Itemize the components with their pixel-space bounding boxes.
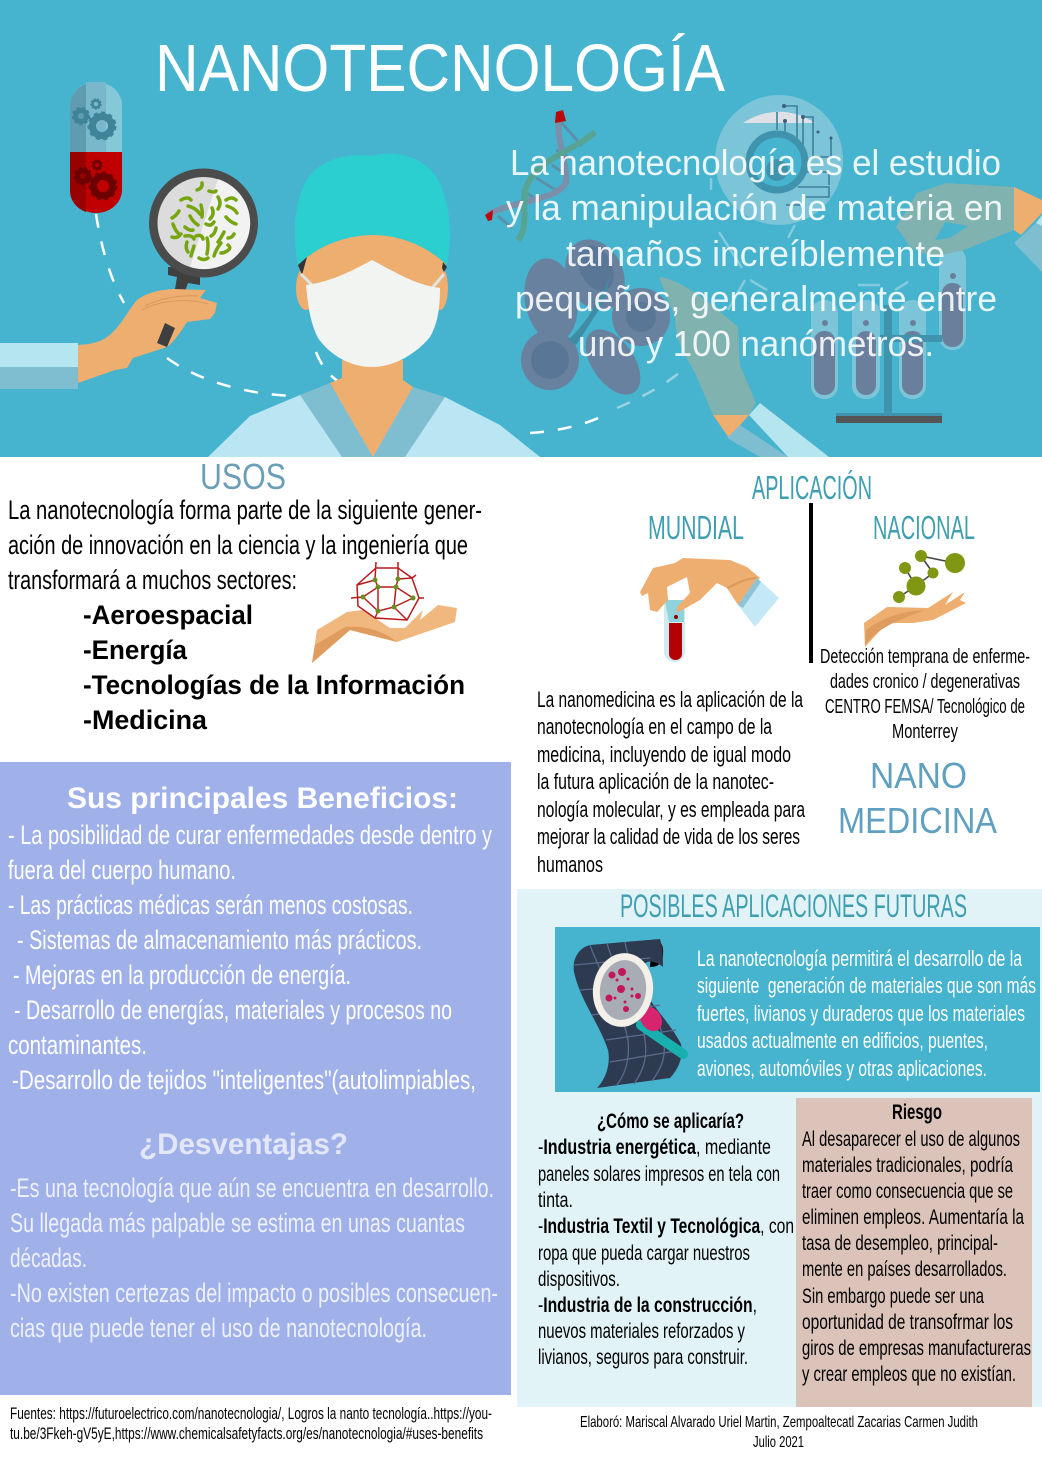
title: NANOTECNOLOGÍA [155, 31, 725, 106]
credits [580, 1414, 978, 1451]
intro text: pequeños, generalmente entre [515, 278, 997, 319]
riesgo text [802, 1128, 1031, 1386]
usos paragraph: transformará a muchos sectores: [8, 565, 297, 595]
intro text: tamaños increíblemente [566, 233, 945, 274]
dashed path [96, 214, 679, 433]
heading: aplicacion: APLICACIÓN [752, 469, 872, 506]
icon: gloved hand [659, 277, 829, 457]
panel: beneficios [0, 762, 511, 1395]
text: mundial: mejorar la calidad de vida de los seres [537, 824, 800, 849]
benefits list: contaminantes. [8, 1030, 147, 1060]
disadvantages text: -No existen certezas del impacto o posibles consecuen- [10, 1278, 498, 1308]
disadvantages text: décadas. [10, 1243, 87, 1273]
intro text: uno y 100 nanómetros. [578, 323, 934, 364]
section: aplicacion [537, 469, 1030, 877]
callout: materiales [555, 927, 1040, 1092]
usos paragraph [8, 495, 482, 595]
section: usos [8, 456, 482, 735]
intro text [506, 142, 1003, 364]
text: como se aplicaria: ¿Cómo se aplicaría? [597, 1110, 744, 1133]
disadvantages text: -Es una tecnología que aún se encuentra en desarrollo. [10, 1173, 494, 1203]
sources [10, 1405, 492, 1443]
text: mundial: nanotecnología en el campo de la [537, 714, 773, 739]
text: como se aplicaria [538, 1110, 794, 1369]
benefits list: - Desarrollo de energías, materiales y procesos no [14, 995, 452, 1025]
heading: nacional: NACIONAL [873, 509, 975, 546]
benefits list: - Mejoras en la producción de energía. [13, 960, 351, 990]
panel: riesgo [796, 1098, 1032, 1407]
benefits list [8, 820, 492, 1095]
heading: nano medicina: NANO [870, 755, 967, 796]
icon: upper right gloved hand [896, 183, 1042, 272]
icon: hand with molecule [864, 550, 966, 647]
text: como se aplicaria: tinta. [538, 1189, 573, 1212]
heading: nano medicina [838, 755, 997, 841]
benefits list: - La posibilidad de curar enfermedades desde dentro y [8, 820, 492, 850]
text: como se aplicaria: livianos, seguros para construir. [538, 1346, 748, 1369]
panel: futuras [517, 888, 1042, 1407]
text: como se aplicaria: -Industria Textil y Tecnológica, con [538, 1215, 794, 1238]
heading: riesgo: Riesgo [892, 1101, 942, 1124]
heading: nano medicina: MEDICINA [838, 800, 997, 841]
usos list: -Medicina [83, 705, 208, 735]
icon: hand with test tube [640, 558, 779, 662]
text: nacional [820, 645, 1030, 743]
intro text: La nanotecnología es el estudio [510, 142, 1001, 183]
text: como se aplicaria: paneles solares impresos en tela con [538, 1163, 780, 1186]
disadvantages text [10, 1173, 498, 1343]
usos list: -Aeroespacial [83, 600, 253, 630]
heading: mundial: MUNDIAL [648, 509, 744, 546]
icon: capsule with gears [70, 82, 122, 213]
text: mundial: la futura aplicación de la nanotec- [537, 769, 774, 794]
usos list: -Energía [83, 635, 188, 665]
benefits list: fuera del cuerpo humano. [8, 855, 236, 885]
text: nacional: Monterrey [892, 720, 959, 743]
text: como se aplicaria: dispositivos. [538, 1268, 620, 1291]
header banner [0, 0, 1042, 457]
benefits list: - Sistemas de almacenamiento más prácticos. [17, 925, 422, 955]
usos paragraph: ación de innovación en la ciencia y la ingeniería que [8, 530, 468, 560]
text: como se aplicaria: nuevos materiales reforzados y [538, 1320, 745, 1343]
usos list: -Tecnologías de la Información [83, 670, 465, 700]
callout text [697, 946, 1036, 1081]
usos paragraph: La nanotecnología forma parte de la siguiente gener- [8, 495, 482, 525]
icon: test tubes on stand [811, 247, 966, 423]
icon: magnifier over nano sheet [574, 939, 683, 1088]
benefits list: -Desarrollo de tejidos "inteligentes"(autolimpiables, [12, 1065, 476, 1095]
illustration: nurse [208, 154, 540, 457]
disadvantages text: cias que puede tener el uso de nanotecnología. [10, 1313, 427, 1343]
benefits list: - Las prácticas médicas serán menos costosas. [8, 890, 413, 920]
sources: tu.be/3Fkeh-gV5yE,https://www.chemicalsafetyfacts.org/es/nanotecnologia/#uses-benefits [10, 1425, 483, 1443]
text: mundial: La nanomedicina es la aplicación de la [537, 687, 804, 712]
credits: Julio 2021 [753, 1434, 804, 1451]
icon: circuit circle [711, 95, 908, 310]
text: mundial: medicina, incluyendo de igual modo [537, 742, 791, 767]
heading: desventajas: ¿Desventajas? [139, 1128, 348, 1161]
text: mundial: nología molecular, y es empleada para [537, 797, 806, 822]
icon: blood cells [518, 230, 670, 404]
text: como se aplicaria: -Industria de la construcción, [538, 1294, 757, 1317]
icon: DNA strand [485, 110, 595, 240]
icon: hand holding magnifier [0, 289, 217, 389]
icon: magnifier with bacteria [149, 168, 258, 291]
heading: beneficios: Sus principales Beneficios: [67, 782, 458, 815]
usos list [83, 600, 465, 735]
text: mundial [537, 687, 806, 877]
text: mundial: humanos [537, 852, 603, 877]
text: como se aplicaria: ropa que pueda cargar nuestros [538, 1242, 750, 1265]
sources: Fuentes: https://futuroelectrico.com/nanotecnologia/, Logros la nanto tecnología..https://you- [10, 1405, 492, 1423]
intro text: y la manipulación de materia en [506, 187, 1003, 228]
disadvantages text: Su llegada más palpable se estima en unas cuantas [10, 1208, 465, 1238]
heading: usos: USOS [200, 456, 286, 497]
text: como se aplicaria: -Industria energética, mediante [538, 1136, 771, 1159]
icon: hand with fullerene [312, 562, 457, 663]
